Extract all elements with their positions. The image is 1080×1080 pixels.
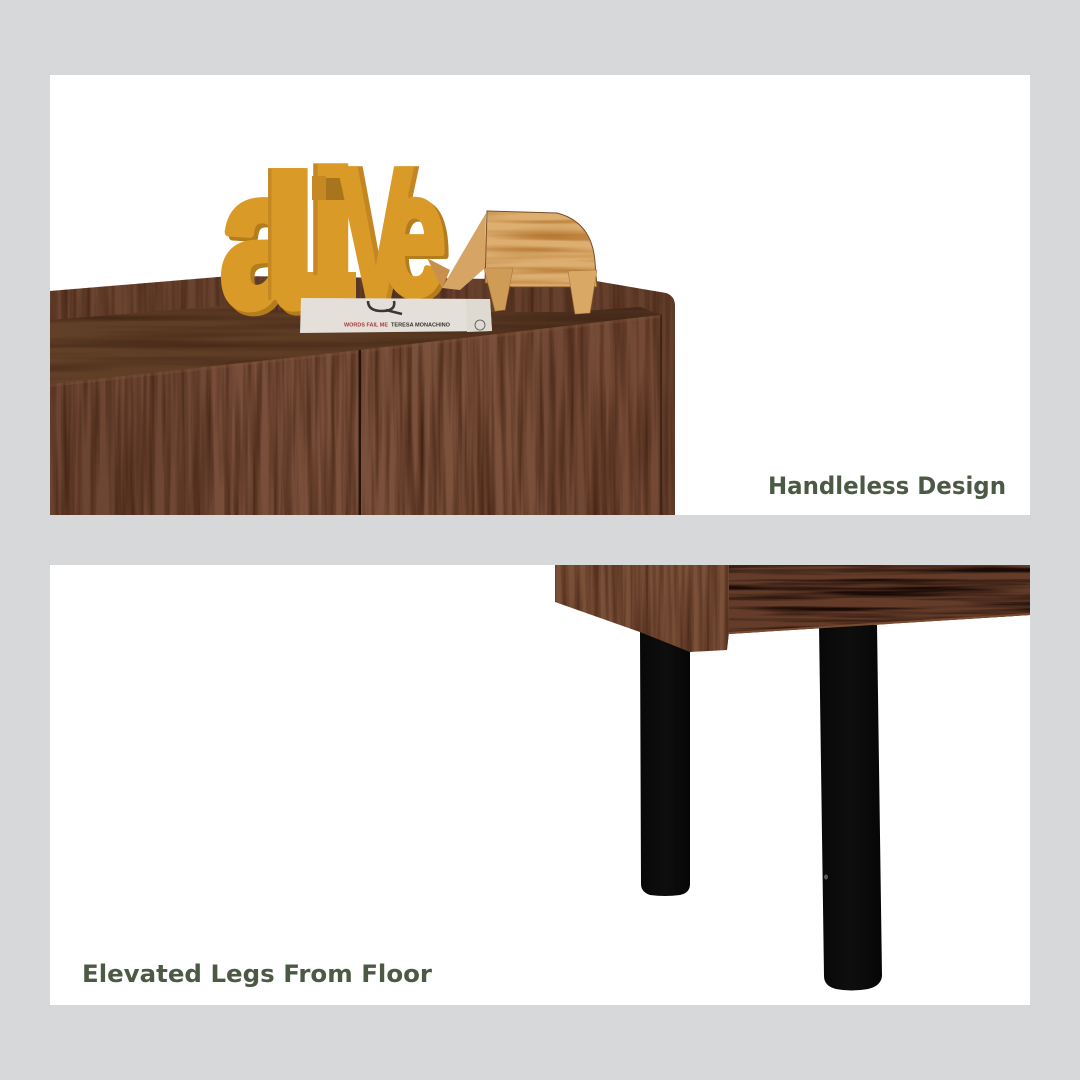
infographic canvas: [50, 75, 1030, 1005]
book author: TERESA MONACHINO: [391, 322, 451, 328]
panel: handleless design: [50, 75, 1030, 520]
elephant body: [485, 211, 597, 287]
front leg: [819, 625, 882, 990]
book cover: [300, 298, 492, 333]
book cover ring icon: [368, 301, 402, 314]
panel background: bottom: [50, 565, 1030, 1005]
letter base: l to i join: [296, 272, 356, 302]
caption: elevated legs: Elevated Legs From Floor: [82, 960, 432, 988]
cabinet top view: [50, 270, 680, 520]
cabinet doors: [50, 310, 665, 520]
elephant front leg: [484, 268, 513, 311]
letter l: l: [249, 136, 325, 339]
letter i: i: [296, 136, 364, 308]
elephant back leg: [568, 270, 597, 314]
elephant head: [442, 213, 486, 290]
cabinet front rail: [729, 565, 1030, 634]
elephant trunk: [427, 258, 450, 288]
book: [300, 298, 492, 333]
letter i: i: [302, 135, 364, 308]
letter a: a: [224, 136, 311, 352]
sculpture: alive letters: [220, 128, 450, 352]
cabinet underside view: [555, 565, 1030, 652]
cabinet top surface: [50, 306, 662, 384]
book title: WORDS FAIL ME: [344, 322, 388, 328]
cabinet side panel: [555, 565, 729, 652]
sculpture: wooden elephant: [427, 205, 605, 314]
book spine strip: [466, 299, 492, 332]
back leg: [640, 630, 690, 896]
letter V: V: [339, 128, 413, 340]
letter V: V: [344, 128, 418, 340]
letter l: l: [253, 136, 326, 339]
right door edge: [660, 315, 662, 515]
letter e: e: [385, 139, 450, 335]
letter e: e: [381, 136, 446, 332]
letter a: a: [220, 132, 307, 348]
panel background: top: [50, 75, 1030, 515]
cabinet back rail and right side: [50, 270, 680, 520]
panel: elevated legs: [50, 560, 1035, 1005]
caption: handleless design: Handleless Design: [768, 472, 1006, 500]
door gap: [358, 350, 361, 515]
book spine emblem: [475, 320, 485, 330]
